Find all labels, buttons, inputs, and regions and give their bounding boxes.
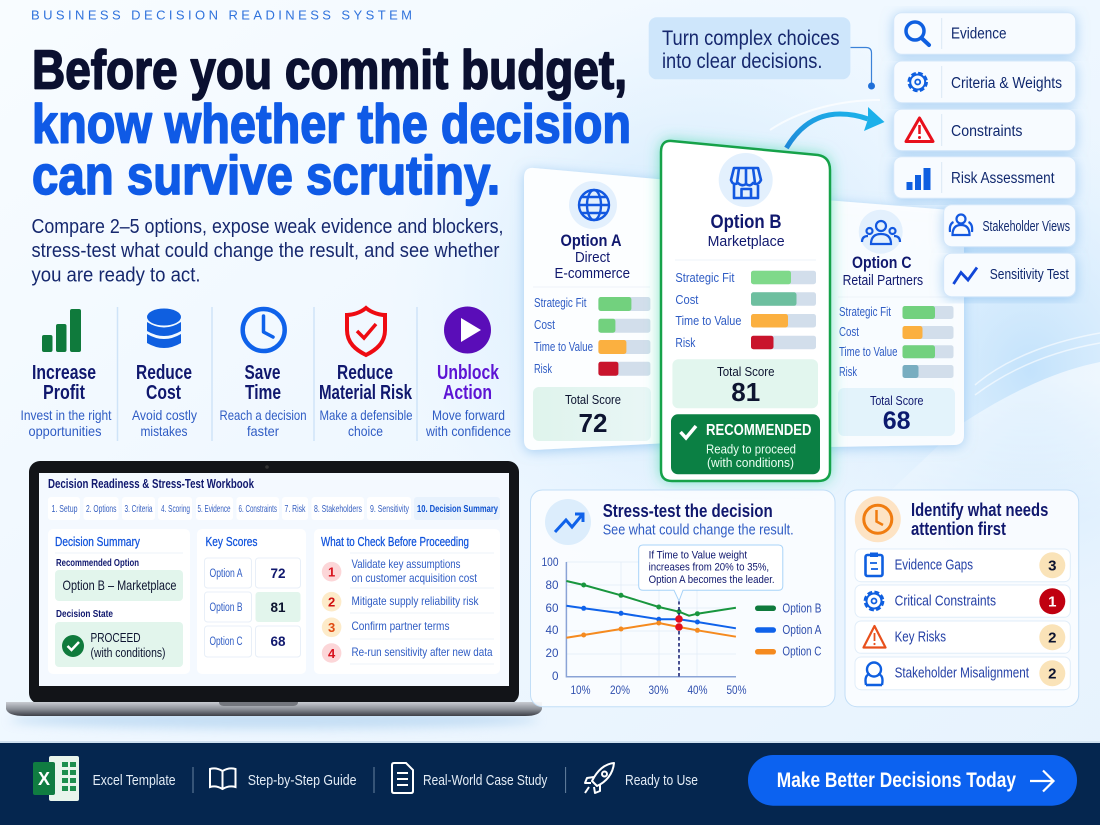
- option card B: Risk: [675, 335, 696, 350]
- intro paragraph: [32, 215, 504, 286]
- benefit: reduce cost: [132, 308, 197, 439]
- panel: key scores: 81: [270, 600, 286, 615]
- row: critical constraints: 1: [1048, 594, 1056, 610]
- workbook tabs: 4. Scoring: [161, 503, 190, 515]
- icon: store: [731, 168, 761, 198]
- option card A: Option A: [560, 231, 622, 250]
- tag: criteria and weights: Criteria & Weights: [951, 75, 1062, 92]
- workbook tabs: 7. Risk: [284, 503, 306, 515]
- panel: decision summary: Option B – Marketplace: [62, 577, 177, 593]
- benefit: save time: Save: [244, 362, 280, 384]
- option card A: Risk: [534, 361, 552, 376]
- line chart: 100: [542, 555, 559, 569]
- tag: criteria and weights: [894, 61, 1076, 103]
- icon: globe: [579, 190, 609, 220]
- benefit: reduce cost: Reduce: [136, 362, 192, 384]
- option card C: Total Score: [870, 394, 924, 408]
- tag: stakeholder views: [944, 205, 1076, 247]
- option card B: Strategic Fit: [675, 270, 735, 285]
- line chart: [542, 555, 747, 697]
- option card B: Cost: [675, 292, 699, 307]
- icon: trend arrow: [555, 514, 583, 532]
- benefit: reduce material risk: Reduce: [337, 362, 393, 384]
- panel: what to check: [314, 529, 500, 674]
- benefit: reduce material risk: choice: [348, 423, 383, 439]
- tag: sensitivity test: Sensitivity Test: [990, 267, 1069, 283]
- option card B: (with conditions): [707, 455, 794, 470]
- tag: risk assessment: [894, 157, 1076, 198]
- chart legend: Option A: [782, 623, 822, 637]
- icon: rocket: [585, 763, 614, 793]
- benefit: reduce material risk: Material Risk: [319, 382, 413, 404]
- panel: attention: [845, 490, 1079, 707]
- panel: attention: Identify what needs: [911, 500, 1048, 520]
- option card B: Total Score: [717, 364, 774, 379]
- row: critical constraints: [855, 585, 1070, 617]
- benefit: reduce cost: mistakes: [140, 423, 188, 439]
- workbook tabs: 10. Decision Summary: [417, 503, 498, 515]
- line chart: 40: [546, 623, 559, 637]
- benefit: reduce cost: Avoid costly: [132, 407, 197, 423]
- benefit: unblock action: with confidence: [425, 423, 511, 439]
- tag: constraints: [894, 109, 1076, 151]
- panel: key scores: 72: [270, 566, 286, 581]
- tag: evidence: [894, 13, 1076, 54]
- tag: risk assessment: Risk Assessment: [951, 170, 1055, 187]
- row: key risks: [855, 621, 1070, 653]
- title: [32, 38, 631, 206]
- line chart: 20%: [610, 683, 630, 697]
- series: option B: [566, 581, 736, 616]
- row: evidence gaps: [855, 549, 1070, 582]
- panel: what to check: Confirm partner terms: [352, 619, 450, 633]
- option card A: Direct: [575, 249, 611, 266]
- benefit: unblock action: Move forward: [432, 407, 505, 423]
- option card A: [524, 168, 668, 450]
- benefit: save time: Time: [245, 382, 281, 404]
- row: stakeholder misalignment: Stakeholder Misalignment: [895, 666, 1029, 682]
- option card A: Total Score: [565, 393, 621, 407]
- footer bar: [0, 741, 1100, 825]
- option card A: Cost: [534, 317, 555, 332]
- chart legend: Option B: [782, 601, 821, 615]
- option card A: 72: [579, 408, 607, 438]
- row: stakeholder misalignment: [855, 657, 1070, 690]
- benefit: increase profit: [20, 309, 112, 439]
- option card B: Marketplace: [708, 234, 785, 250]
- option card B: 81: [731, 377, 760, 407]
- benefit: reduce material risk: [319, 308, 413, 439]
- option card A: Time to Value: [534, 339, 593, 354]
- benefit: unblock action: [425, 306, 511, 439]
- benefit: increase profit: Profit: [43, 382, 85, 404]
- panel: what to check: 2: [328, 594, 335, 610]
- tag stack: [894, 13, 1076, 297]
- panel: key scores: Key Scores: [206, 534, 258, 549]
- tag: constraints: Constraints: [951, 123, 1023, 140]
- row: stakeholder misalignment: 2: [1048, 666, 1056, 682]
- benefits row: [20, 306, 511, 441]
- panel: what to check: on customer acquisition cost: [352, 571, 478, 585]
- chart legend: [755, 601, 822, 659]
- option card B: RECOMMENDED: [706, 422, 812, 439]
- footer item: excel template: Excel Template: [93, 773, 176, 789]
- option card B: Option B: [710, 212, 782, 233]
- row: key risks: 2: [1048, 630, 1056, 646]
- option card B: [661, 141, 830, 481]
- panel: stress test: [530, 490, 835, 707]
- option card C: Time to Value: [839, 345, 898, 359]
- panel: decision summary: [48, 529, 190, 674]
- icon: excel: X: [38, 769, 50, 789]
- panel: key scores: [197, 529, 306, 674]
- option card C: Risk: [839, 365, 858, 379]
- callout: [649, 17, 875, 89]
- option card A: Strategic Fit: [534, 295, 587, 310]
- row: evidence gaps: 3: [1048, 558, 1056, 574]
- chart callout: increases from 20% to 35%,: [649, 562, 769, 574]
- benefit: reduce material risk: Make a defensible: [320, 407, 413, 423]
- workbook title: Decision Readiness & Stress-Test Workbook: [48, 477, 254, 491]
- icon: orange clock: [864, 505, 892, 533]
- panel: what to check: Re-run sensitivity after new data: [352, 645, 493, 659]
- line chart: 80: [546, 578, 559, 592]
- icon: people: [862, 221, 900, 244]
- laptop: [6, 461, 542, 729]
- series: option A: [566, 606, 736, 628]
- option card C: Cost: [839, 325, 859, 339]
- chart callout: [639, 545, 783, 601]
- row: key risks: Key Risks: [895, 630, 946, 646]
- benefit: reduce cost: Cost: [146, 382, 181, 404]
- row: evidence gaps: Evidence Gaps: [895, 558, 973, 574]
- panel: stress test: Stress-test the decision: [603, 500, 773, 521]
- panel: what to check: Validate key assumptions: [352, 557, 460, 571]
- option card C: Strategic Fit: [839, 305, 891, 319]
- panel: key scores: Option A: [210, 568, 243, 580]
- title: Before you commit budget,: [32, 38, 627, 100]
- eyebrow: BUSINESS DECISION READINESS SYSTEM: [31, 8, 412, 22]
- line chart: 60: [546, 601, 559, 615]
- workbook tabs: 6. Constraints: [238, 503, 277, 515]
- panel: what to check: What to Check Before Proceeding: [321, 534, 469, 549]
- series: option C: [566, 620, 736, 638]
- line chart: 0: [552, 669, 559, 683]
- option card B: Time to Value: [675, 313, 741, 328]
- call to action button: [748, 755, 1077, 806]
- call to action button: Make Better Decisions Today: [777, 769, 1016, 792]
- callout: Turn complex choices: [662, 27, 840, 50]
- option card C: 68: [883, 407, 911, 435]
- option card C: [825, 200, 964, 447]
- workbook tabs: 2. Options: [86, 503, 116, 515]
- panel: what to check: 3: [328, 620, 335, 635]
- line chart: 40%: [688, 683, 708, 697]
- option card C: Option C: [852, 253, 912, 272]
- arrow: [786, 107, 884, 148]
- tag: sensitivity test: [944, 253, 1076, 297]
- tag: stakeholder views: Stakeholder Views: [982, 219, 1070, 235]
- intro paragraph: Compare 2–5 options, expose weak evidence and blockers,: [32, 215, 504, 238]
- panel: what to check: Mitigate supply reliability risk: [352, 594, 479, 608]
- option card A: E-commerce: [554, 265, 630, 282]
- workbook tabs: 5. Evidence: [198, 503, 231, 515]
- icon: document: [392, 763, 413, 793]
- benefit: save time: [220, 309, 306, 439]
- benefit: unblock action: Unblock: [437, 362, 500, 384]
- benefit: increase profit: opportunities: [28, 423, 102, 439]
- panel: what to check: 4: [328, 646, 336, 661]
- panel: key scores: Option B: [210, 602, 243, 614]
- line chart: 30%: [648, 683, 669, 697]
- panel: attention: attention first: [911, 519, 1006, 539]
- title: know whether the decision: [32, 92, 631, 154]
- workbook tabs: 8. Stakeholders: [314, 503, 362, 515]
- benefit: increase profit: Increase: [32, 362, 96, 384]
- row: critical constraints: Critical Constraints: [895, 594, 996, 610]
- intro paragraph: you are ready to act.: [32, 264, 200, 286]
- line chart: 50%: [726, 683, 747, 697]
- panel: key scores: Option C: [210, 636, 242, 648]
- panel: decision summary: Decision State: [56, 608, 113, 620]
- chart callout: If Time to Value weight: [649, 550, 748, 562]
- intro paragraph: stress-test what could change the result, and see whether: [32, 239, 500, 262]
- title: can survive scrutiny.: [32, 144, 500, 206]
- chart callout: Option A becomes the leader.: [649, 574, 775, 586]
- benefit: increase profit: Invest in the right: [20, 407, 112, 423]
- panel: decision summary: PROCEED: [90, 631, 140, 645]
- panel: decision summary: Decision Summary: [55, 534, 140, 549]
- workbook tabs: 3. Criteria: [124, 503, 153, 515]
- panel: decision summary: Recommended Option: [56, 557, 139, 569]
- panel: what to check: 1: [328, 564, 335, 580]
- panel: key scores: 68: [270, 634, 286, 649]
- panel: decision summary: (with conditions): [90, 646, 166, 660]
- benefit: save time: Reach a decision: [220, 407, 306, 423]
- footer item: guide: Step-by-Step Guide: [248, 773, 356, 789]
- option card B: Ready to proceed: [706, 442, 796, 456]
- footer item: ready to use: Ready to Use: [625, 773, 698, 789]
- chart legend: Option C: [782, 645, 821, 659]
- line chart: 10%: [570, 683, 591, 697]
- callout: into clear decisions.: [662, 50, 822, 73]
- benefit: unblock action: Action: [443, 382, 492, 404]
- icon: book: [210, 768, 236, 789]
- line chart: 20: [546, 646, 559, 660]
- option card C: Retail Partners: [843, 273, 923, 289]
- panel: stress test: See what could change the result.: [603, 522, 794, 538]
- workbook tabs: 1. Setup: [52, 503, 78, 515]
- workbook tabs: 9. Sensitivity: [370, 503, 409, 515]
- workbook tabs: [48, 497, 500, 520]
- icon: excel: [33, 756, 79, 801]
- footer item: case study: Real-World Case Study: [423, 773, 548, 789]
- tag: evidence: Evidence: [951, 26, 1006, 42]
- benefit: save time: faster: [247, 423, 279, 439]
